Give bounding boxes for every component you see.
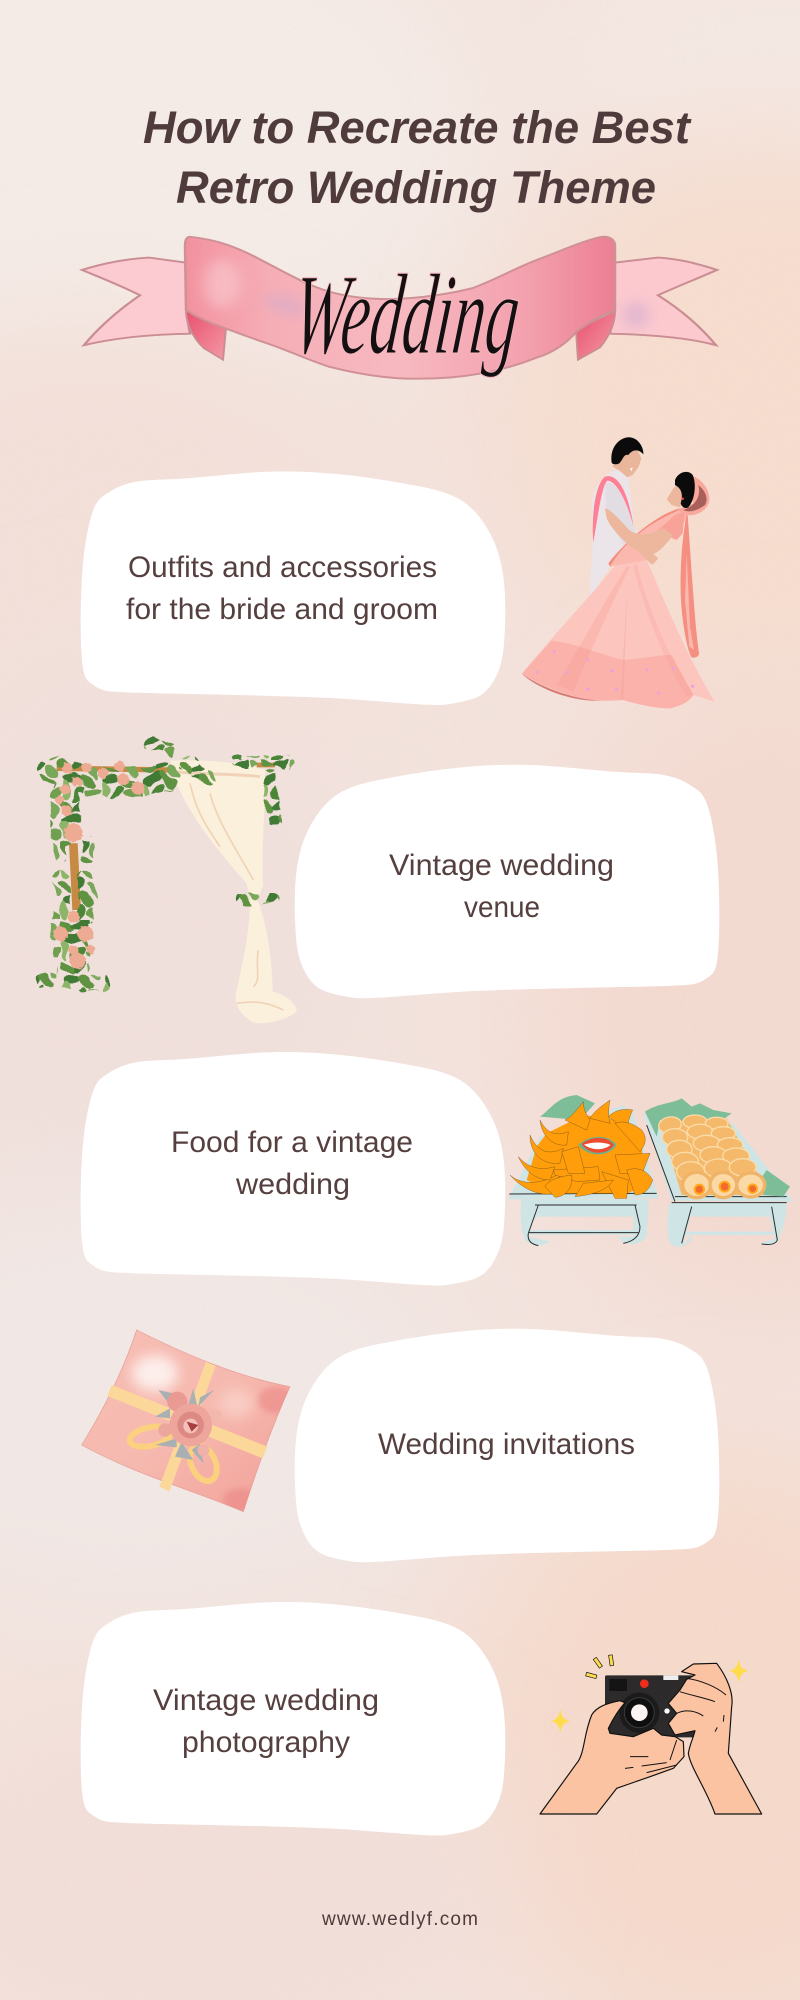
right table xyxy=(643,1098,793,1247)
ribbon shapes xyxy=(82,237,717,379)
panel: outfits card: for the bride and groom xyxy=(126,593,438,626)
panel: venue card: venue xyxy=(464,891,540,924)
sparkles xyxy=(551,1659,749,1733)
panel: food card: wedding xyxy=(235,1168,350,1201)
curtain xyxy=(170,760,297,1023)
panel: invitations card xyxy=(295,1329,719,1562)
flash lines xyxy=(586,1655,614,1679)
illustration: invitation pillow with rings xyxy=(82,1330,295,1512)
rings xyxy=(128,1423,222,1485)
right hand xyxy=(668,1663,762,1814)
illustration: food tables xyxy=(508,1095,793,1247)
roses xyxy=(53,761,145,969)
bride skirt xyxy=(522,551,715,708)
bride head and veil xyxy=(667,472,709,515)
panel: venue card xyxy=(295,765,719,998)
panel: outfits card: Outfits and accessories xyxy=(128,551,437,584)
chicken wings xyxy=(510,1100,653,1198)
title: How to Recreate the Best xyxy=(143,102,692,153)
panel: invitations card: Wedding invitations xyxy=(378,1428,635,1461)
ribbon script word: Wedding xyxy=(287,250,526,378)
rose cluster xyxy=(155,1388,222,1463)
illustration: bride and groom xyxy=(522,437,715,708)
title xyxy=(143,102,692,213)
ribbons xyxy=(107,1385,267,1458)
panel: photography card xyxy=(81,1602,505,1836)
left table xyxy=(508,1095,658,1246)
post and beam xyxy=(57,765,275,910)
illustration: floral arch with curtain xyxy=(42,743,297,1023)
panel: venue card: Vintage wedding xyxy=(389,849,614,882)
left hand xyxy=(540,1701,684,1814)
bride top and arm xyxy=(605,508,699,658)
panel: food card: Food for a vintage xyxy=(171,1126,413,1159)
panel: photography card: Vintage wedding xyxy=(153,1684,379,1717)
groom xyxy=(590,437,644,597)
panel: photography card: photography xyxy=(182,1726,350,1759)
panel: food card xyxy=(81,1052,505,1286)
illustration: hands holding camera xyxy=(540,1655,762,1814)
panel: outfits card xyxy=(81,471,505,705)
ribbon banner with Wedding script xyxy=(82,237,717,379)
foliage xyxy=(42,743,287,983)
pillow xyxy=(82,1330,290,1512)
footer url: www.wedlyf.com xyxy=(321,1909,478,1930)
rolls xyxy=(660,1118,763,1195)
title: Retro Wedding Theme xyxy=(176,162,656,213)
camera xyxy=(605,1675,697,1740)
